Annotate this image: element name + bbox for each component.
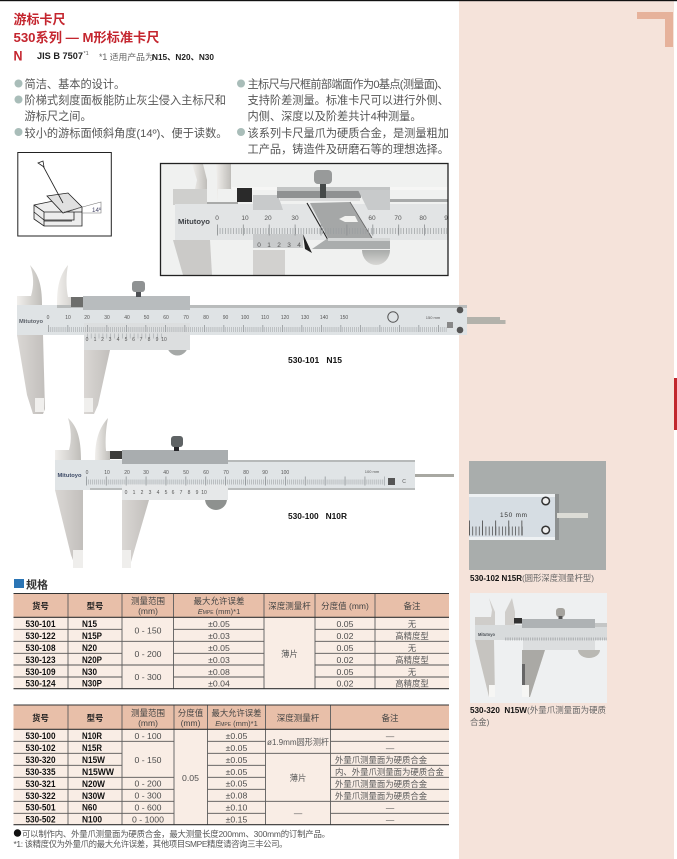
table 1 rows: 0.05 — [337, 667, 354, 677]
table 2 rows: N20W — [82, 779, 105, 789]
table 2 merged cells: 0.05 — [182, 773, 199, 783]
table 1 rows: 无 — [408, 667, 417, 677]
table 2 header: 深度测量杆 — [277, 713, 320, 723]
table 2 header: 测量范围 — [131, 708, 165, 718]
photo: 530-102 N15R depth rod — [469, 461, 606, 570]
caliper: 530-100 N10R: 0 — [86, 470, 89, 476]
table 2 rows: — — [386, 743, 395, 753]
table 2 rows: 0 - 300 — [134, 790, 162, 800]
caliper: 530-101 N15: 9 — [156, 337, 159, 343]
photo: closeup of vernier: 0 — [215, 215, 219, 222]
table 1 rows: N30P — [82, 678, 102, 688]
table 2 rows: — — [386, 802, 395, 812]
caliper: 530-100 N10R: 6 — [172, 490, 175, 496]
table 2 header: 最大允许误差 — [212, 708, 262, 718]
caliper: 530-100 N10R: 60 — [203, 470, 209, 476]
table 2 rows: 外量爪测量面为硬质合金 — [335, 755, 428, 765]
table 1 rows: 530-123 — [26, 655, 56, 665]
photo: closeup of vernier: 1 — [267, 242, 271, 249]
caliper: 530-100 N10R: 5 — [165, 490, 168, 496]
table 2 rows: 530-502 — [26, 814, 56, 824]
caliper: 530-100 N10R: 100 mm — [365, 469, 380, 474]
table 2 rows: ±0.08 — [226, 790, 248, 800]
table 1 rows: 无 — [408, 643, 417, 653]
title: 游标卡尺 — [14, 12, 66, 27]
table 2 rows — [26, 731, 444, 824]
table 2 rows: — — [386, 814, 395, 824]
table 2 rows: 外量爪测量面为硬质合金 — [335, 791, 428, 801]
features right column: 主标尺与尺框前部端面作为0基点(测量面)、 — [248, 77, 448, 91]
features right column — [237, 77, 449, 156]
features left column: 阶梯式刻度面板能防止灰尘侵入主标尺和 — [24, 93, 226, 107]
caliper: 530-100 N10R: 10 — [201, 490, 207, 496]
features left column: 游标尺之间。 — [24, 109, 92, 123]
caliper: 530-101 N15: 0 — [86, 337, 89, 343]
label: 530-101 N15: 530-101 N15 — [288, 355, 342, 365]
table 2 rows: N30W — [82, 791, 105, 801]
table 2 rows: 外量爪测量面为硬质合金 — [335, 779, 428, 789]
table 1 header: 深度测量杆 — [268, 601, 311, 611]
table 2 rows: N15WW — [82, 767, 114, 777]
caliper: 530-100 N10R: 10 — [104, 470, 110, 476]
photo: closeup of vernier: 0 — [257, 242, 261, 249]
table 2 header: (mm) — [138, 718, 158, 728]
photo: closeup of vernier: 70 — [394, 215, 402, 222]
caliper: 530-101 N15: 7 — [140, 337, 143, 343]
table: specs 2 — [14, 705, 449, 825]
caption: 530-102 N15R — [470, 573, 594, 583]
heading: specifications: 规格 — [26, 578, 48, 592]
table 1 rows: 高精度型 — [395, 678, 429, 688]
standard line: JIS B 7507 — [37, 51, 83, 62]
photo: 530-102 N15R depth rod: 150 mm — [500, 512, 527, 519]
caliper: 530-101 N15: 50 — [144, 315, 149, 321]
table 2 merged cells: — — [294, 808, 303, 818]
table 1 header — [32, 596, 421, 616]
table 1 header: 测量范围 — [131, 596, 165, 606]
caliper: 530-100 N10R: 50 — [183, 470, 189, 476]
features left column — [14, 77, 227, 140]
table 1 rows: ±0.05 — [208, 643, 230, 653]
table 1 merged cells: 0 - 300 — [134, 672, 162, 682]
caliper: 530-100 N10R: 7 — [180, 490, 183, 496]
caliper: 530-101 N15: 6 — [132, 337, 135, 343]
caliper: 530-100 N10R: 20 — [124, 470, 130, 476]
table 2 merged cells: 0 - 150 — [134, 755, 162, 765]
table 1 header: 分度值 (mm) — [321, 601, 369, 611]
caliper: 530-101 N15: 130 — [301, 315, 309, 321]
table 1 rows: 0.02 — [337, 631, 354, 641]
table 1 rows: ±0.04 — [208, 678, 230, 688]
caliper: 530-101 N15: 20 — [84, 315, 90, 321]
table 2 rows: 530-501 — [26, 802, 56, 812]
caliper: 530-101 N15: 100 — [241, 315, 249, 321]
caliper: 530-100 N10R: 3 — [149, 490, 152, 496]
table 2 merged cells: ø1.9mm圆形测杆 — [267, 737, 330, 747]
table 2 rows: ±0.15 — [226, 814, 248, 824]
title: 530系列 — M形标准卡尺 — [14, 30, 160, 45]
table 1 rows: N20 — [82, 643, 97, 653]
table 2 rows: — — [386, 731, 395, 741]
table 2 rows: ±0.05 — [226, 731, 248, 741]
caliper: 530-101 N15: 80 — [203, 315, 209, 321]
caliper: 530-100 N10R: 9 — [196, 490, 199, 496]
table 1 header: 备注 — [403, 601, 421, 611]
table 1 merged cells: 0 - 200 — [134, 649, 162, 659]
table 1 rows: 530-101 — [26, 619, 56, 629]
caliper: 530-101 N15 — [17, 265, 506, 414]
label: 530-100 N10R: 530-100 N10R — [288, 511, 348, 521]
table 2 header: 型号 — [87, 713, 103, 723]
photo: closeup of vernier: 20 — [264, 215, 272, 222]
table 1 rows: 0.05 — [337, 619, 354, 629]
caliper: 530-101 N15: 1 — [94, 337, 97, 343]
table 1 rows: N20P — [82, 655, 102, 665]
table 1 rows: N15 — [82, 619, 97, 629]
features right column: 工产品，铸造件及研磨石等的理想选择。 — [248, 142, 449, 156]
caliper: 530-101 N15: 0 — [47, 315, 50, 321]
table 2 header: 分度值 — [178, 708, 204, 718]
standard line: *1 — [84, 51, 89, 57]
caliper: 530-101 N15: 40 — [124, 315, 130, 321]
table 1 rows: N30 — [82, 667, 97, 677]
photo: closeup of vernier: 3 — [287, 242, 291, 249]
caliper: 530-101 N15: 140 — [320, 315, 328, 321]
caliper: 530-101 N15: 90 — [223, 315, 228, 321]
table 2 rows: 530-335 — [26, 767, 56, 777]
table 2 rows: 530-320 — [26, 755, 56, 765]
caliper: 530-101 N15: 2 — [101, 337, 104, 343]
features left column: 简洁、基本的设计。 — [24, 77, 125, 91]
table 1 rows: 无 — [408, 619, 417, 629]
standard line — [14, 48, 215, 64]
table 1 header: 货号 — [32, 601, 49, 611]
caliper: 530-100 N10R: 0 — [125, 490, 128, 496]
heading: specifications — [14, 578, 48, 592]
table 1 rows: 530-109 — [26, 667, 56, 677]
table 1 rows: 高精度型 — [395, 655, 429, 665]
features right column: 内侧、深度以及阶差共计4种测量。 — [248, 109, 422, 123]
photo: closeup of vernier: 4 — [297, 242, 301, 249]
table 2 rows: 0 - 200 — [134, 778, 162, 788]
table 1 rows: 0.02 — [337, 678, 354, 688]
caliper: 530-100 N10R: 100 — [281, 470, 289, 476]
table 1 header: 型号 — [87, 601, 103, 611]
diagram: 14 degree vernier angle: 14º — [92, 207, 102, 214]
caliper: 530-100 N10R: 4 — [157, 490, 160, 496]
caliper: 530-100 N10R: 90 — [262, 470, 268, 476]
table 1 rows: 530-108 — [26, 643, 56, 653]
standard line: *1 适用产品为 — [99, 51, 154, 62]
table 2 rows: 0 - 1000 — [132, 814, 164, 824]
caliper: 530-100 N10R — [55, 418, 454, 568]
table 2 rows: 530-321 — [26, 779, 56, 789]
table 2 rows: N100 — [82, 814, 102, 824]
features right column: 支持阶差测量。标准卡尺可以进行外侧、 — [248, 93, 449, 107]
caliper: 530-100 N10R: 30 — [143, 470, 149, 476]
photo: 530-320 N15W — [470, 593, 607, 703]
caliper: 530-100 N10R: 2 — [141, 490, 144, 496]
table 1 rows: ±0.08 — [208, 667, 230, 677]
table 1 rows: ±0.05 — [208, 619, 230, 629]
footnotes — [14, 829, 330, 849]
caliper: 530-101 N15: Mitutoyo — [19, 319, 44, 325]
table: specs 1 — [14, 594, 449, 689]
table 2 merged cells — [134, 737, 330, 818]
table 1 rows: 0.02 — [337, 655, 354, 665]
caliper: 530-101 N15: 8 — [148, 337, 151, 343]
caliper: 530-100 N10R: 40 — [163, 470, 169, 476]
table 1 merged cells — [134, 626, 298, 682]
caliper: 530-101 N15: 120 — [281, 315, 289, 321]
table 2 rows: 530-102 — [26, 743, 56, 753]
table 2 rows: 530-322 — [26, 791, 56, 801]
caliper: 530-101 N15: 10 — [161, 337, 167, 343]
photo: 530-320 N15W: Mitutoyo — [478, 632, 495, 637]
diagram: 14 degree vernier angle — [18, 152, 111, 236]
table 2 rows: ±0.05 — [226, 743, 248, 753]
table 2 rows: N10R — [82, 731, 102, 741]
caliper: 530-101 N15: 4 — [117, 337, 120, 343]
caption: 530-102 N15R: (圆形深度测量杆型) — [522, 573, 594, 583]
table 2 header — [32, 708, 399, 728]
table 1 header: (mm) — [138, 606, 158, 616]
table 2 rows: N15W — [82, 755, 105, 765]
caliper: 530-101 N15: 150 mm — [426, 315, 441, 320]
caliper: 530-101 N15: 5 — [125, 337, 128, 343]
caliper: 530-100 N10R: 80 — [243, 470, 249, 476]
caliper: 530-100 N10R: Mitutoyo — [58, 473, 82, 479]
table 2 rows: ±0.05 — [226, 755, 248, 765]
table 1 merged cells: 薄片 — [281, 649, 298, 659]
table 2 header: 备注 — [381, 713, 399, 723]
table 1 header: EMPE (mm)*1 — [198, 607, 240, 616]
table 2 rows: 0 - 600 — [134, 802, 162, 812]
panel: right sidebar — [459, 1, 674, 859]
table 2 header: 货号 — [32, 713, 49, 723]
table 2 rows: ±0.05 — [226, 778, 248, 788]
table 1 header: 最大允许误差 — [193, 596, 245, 606]
caliper: 530-100 N10R: 1 — [133, 490, 136, 496]
table 2 rows: 0 - 100 — [134, 731, 162, 741]
photo: closeup of vernier: 2 — [277, 242, 281, 249]
photo: closeup of vernier — [160, 164, 448, 276]
icon: corner bracket — [637, 12, 673, 47]
table 1 rows: 高精度型 — [395, 631, 429, 641]
caption: 530-102 N15R: 530-102 N15R — [470, 573, 523, 583]
table 2 header: (mm) — [181, 718, 201, 728]
caption: 530-320 N15W: 合金) — [470, 717, 490, 727]
photo: closeup of vernier: 80 — [419, 215, 427, 222]
caliper: 530-100 N10R: 70 — [223, 470, 229, 476]
caption: 530-320 N15W: 530-320 N15W — [470, 705, 528, 715]
table 2 rows: ±0.05 — [226, 767, 248, 777]
table 1 rows: 0.05 — [337, 643, 354, 653]
table 1 rows: 530-122 — [26, 631, 56, 641]
table 1 rows: ±0.03 — [208, 655, 230, 665]
table 2 rows: 530-100 — [26, 731, 56, 741]
features right column: 该系列卡尺量爪为硬质合金，是测量粗加 — [248, 126, 449, 140]
caliper: 530-100 N10R: 8 — [188, 490, 191, 496]
table 2 rows: 内、外量爪测量面为硬质合金 — [335, 767, 444, 777]
caliper: 530-101 N15: 150 — [340, 315, 348, 321]
caliper: 530-101 N15: 60 — [163, 315, 169, 321]
caliper: 530-101 N15: 30 — [104, 315, 110, 321]
table 2 merged cells: 薄片 — [290, 773, 306, 783]
top rule — [0, 0, 677, 1]
side tab — [674, 378, 677, 430]
table 2 rows: ±0.10 — [226, 802, 248, 812]
table 2 rows: N60 — [82, 802, 97, 812]
photo: closeup of vernier: 60 — [368, 215, 376, 222]
table 1 rows — [26, 619, 429, 688]
features left column: 较小的游标面倾斜角度(14º)、便于读数。 — [24, 126, 227, 140]
table 1 rows: 530-124 — [26, 678, 56, 688]
caliper: 530-100 N10R: C — [402, 479, 406, 485]
footnotes: 可以制作内、外量爪测量面为硬质合金，最大测量长度200mm、300mm的订制产品。 — [22, 829, 330, 839]
table 2 header: EMPE (mm)*1 — [215, 719, 258, 728]
photo: closeup of vernier: 9 — [444, 215, 448, 222]
caption: 530-320 N15W: (外量爪测量面为硬质 — [527, 705, 606, 715]
table 1 merged cells: 0 - 150 — [134, 626, 162, 636]
photo: closeup of vernier: 30 — [291, 215, 299, 222]
photo: closeup of vernier: Mitutoyo — [178, 217, 210, 226]
table 1 rows: ±0.03 — [208, 631, 230, 641]
table 2 rows: N15R — [82, 743, 102, 753]
caliper: 530-101 N15: 3 — [109, 337, 112, 343]
caption: 530-320 N15W — [470, 705, 606, 727]
caliper: 530-101 N15: 10 — [65, 315, 71, 321]
caliper: 530-101 N15: 70 — [183, 315, 189, 321]
table 1 rows: N15P — [82, 631, 102, 641]
title — [14, 12, 160, 45]
standard line: N — [14, 48, 22, 64]
standard line: N15、N20、N30 — [152, 53, 215, 62]
caliper: 530-101 N15: 110 — [261, 315, 269, 321]
photo: closeup of vernier: 10 — [241, 215, 249, 222]
footnotes: *1: 该精度仅为外量爪的最大允许误差，其他项目SMPE精度请咨询三丰公司。 — [14, 839, 288, 849]
